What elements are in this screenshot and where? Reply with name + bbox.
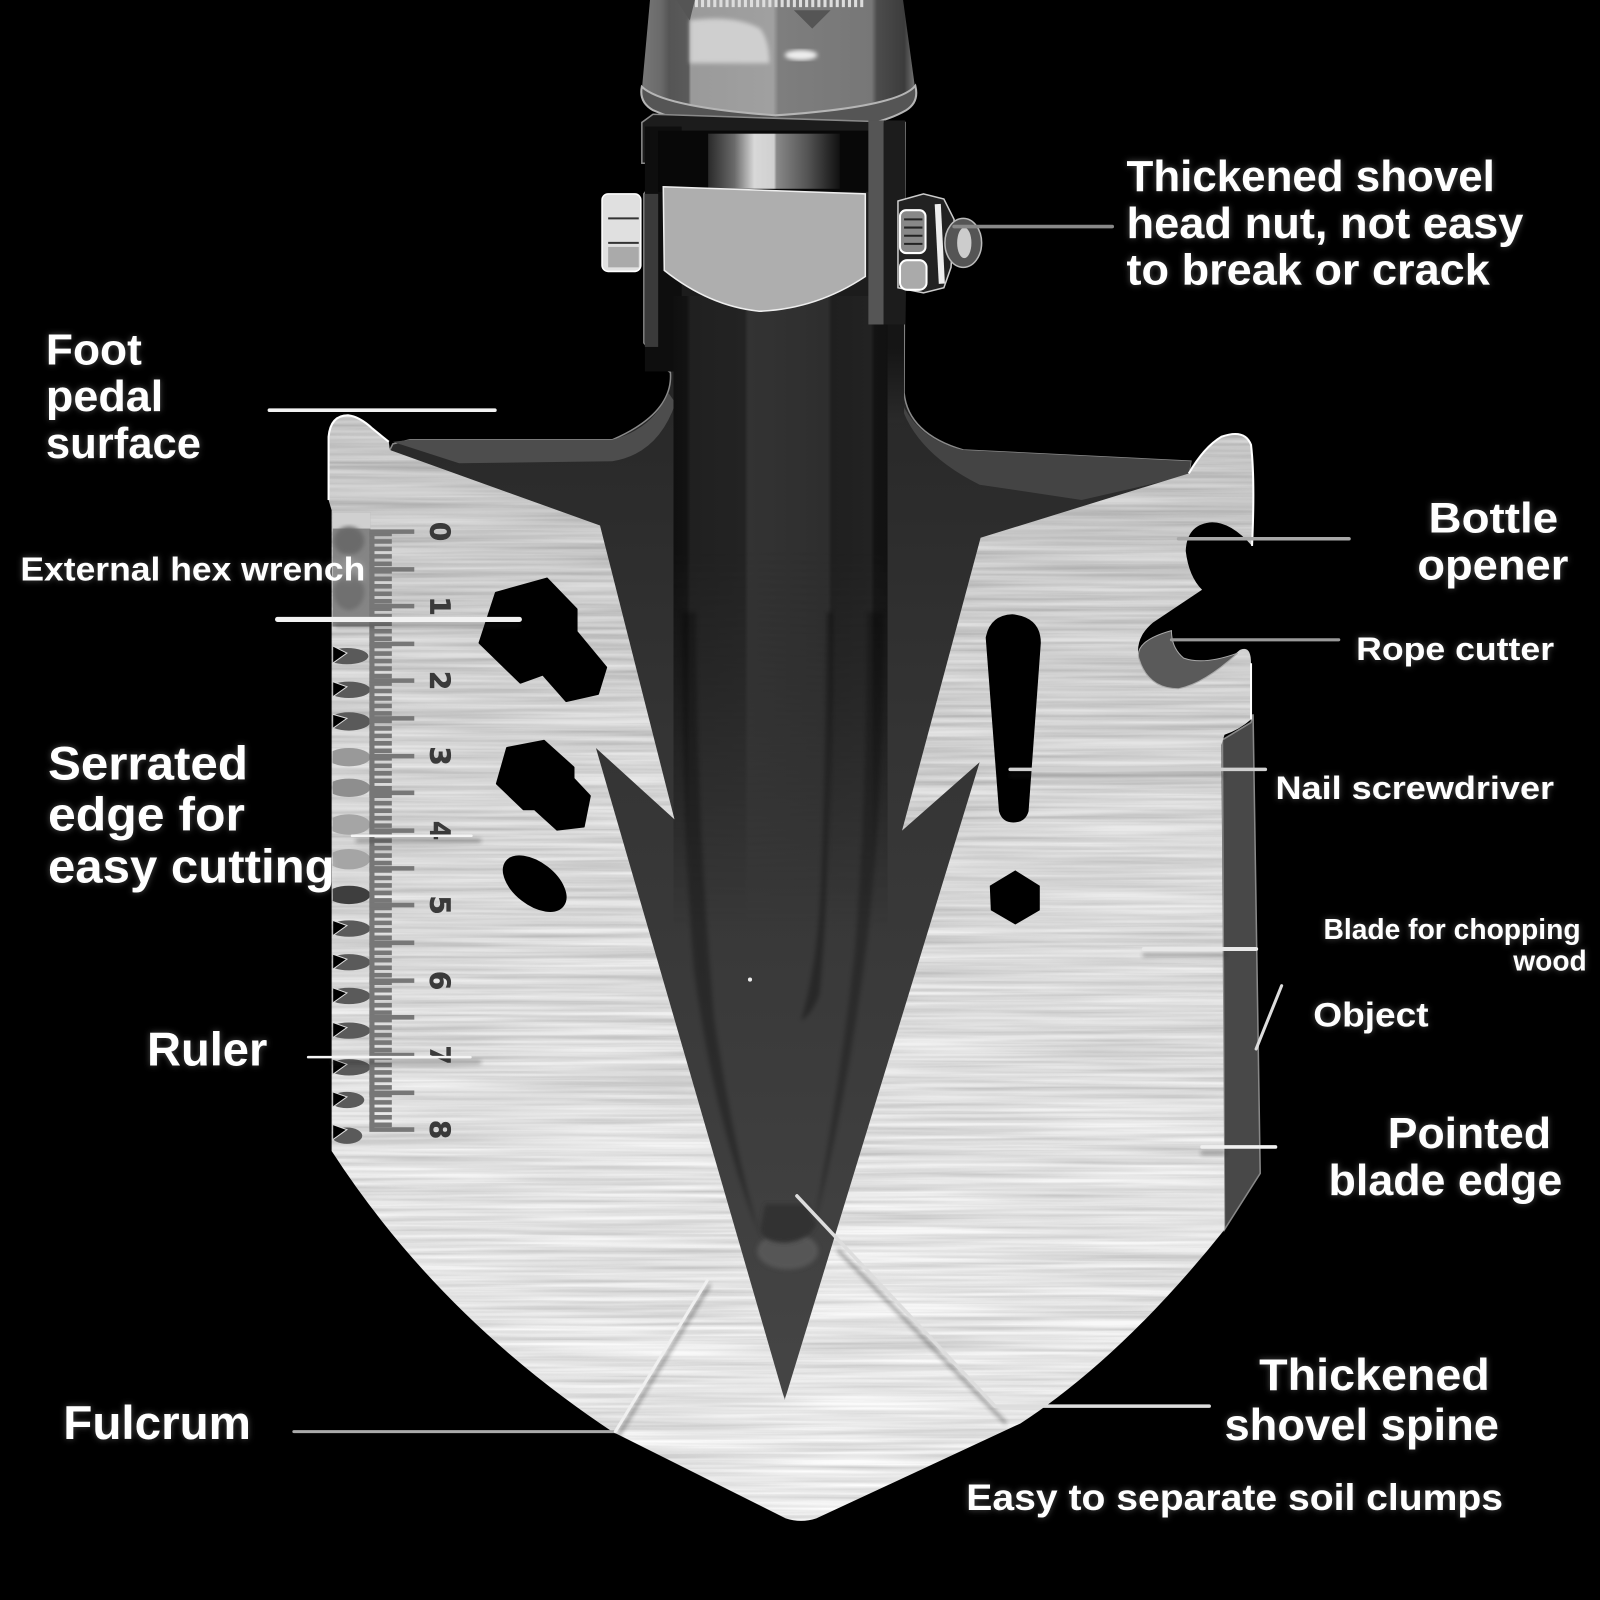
small rivet dot xyxy=(748,978,752,982)
label: blade for chopping wood xyxy=(1323,914,1587,977)
brushed steel blade xyxy=(306,408,1286,1531)
knurled silver wedge xyxy=(663,187,865,311)
ruler numbers: 7 xyxy=(424,1046,456,1065)
label: thickened shovel spine: Thickened xyxy=(1259,1349,1490,1400)
label: pointed blade edge: blade edge xyxy=(1329,1156,1562,1205)
label: pointed blade edge: Pointed xyxy=(1388,1109,1551,1158)
label: foot pedal surface: Foot xyxy=(46,325,142,374)
label: serrated edge: Serrated xyxy=(48,738,248,790)
ruler numbers: 8 xyxy=(424,1120,456,1139)
label: nail screwdriver: Nail screwdriver xyxy=(1276,769,1554,806)
leader lines xyxy=(269,227,1349,1432)
shovel illustration xyxy=(306,0,1286,1531)
label: blade for chopping wood: Blade for chopping xyxy=(1323,914,1581,946)
left bolt xyxy=(602,194,641,271)
label: rope cutter: Rope cutter xyxy=(1356,630,1554,667)
ruler numbers: 6 xyxy=(424,971,456,990)
label: serrated edge: edge for xyxy=(48,789,245,841)
label: thickened shovel head nut: to break or crack xyxy=(1127,246,1490,295)
shovel handle ferrule xyxy=(641,0,916,134)
ruler numbers: 3 xyxy=(424,747,456,766)
rope cutter edge xyxy=(1138,631,1238,689)
ruler numbers: 1 xyxy=(424,597,456,616)
label: foot pedal surface: pedal xyxy=(46,372,163,421)
label: foot pedal surface: surface xyxy=(46,419,201,468)
label: fulcrum: Fulcrum xyxy=(63,1397,251,1449)
label: pointed blade edge xyxy=(1329,1109,1562,1205)
label: ruler: Ruler xyxy=(147,1023,267,1075)
label: external hex wrench: External hex wrench xyxy=(20,552,365,589)
spine grooves xyxy=(682,612,884,1269)
ruler numbers: 0 xyxy=(424,522,456,541)
label: bottle opener: opener xyxy=(1417,542,1569,590)
ruler numbers xyxy=(424,522,456,1139)
label: thickened shovel head nut: head nut, not easy xyxy=(1127,199,1524,248)
hex wrench holes xyxy=(480,579,606,922)
leader line shadows xyxy=(332,626,1224,1436)
label: bottle opener: Bottle xyxy=(1429,495,1558,543)
label: foot pedal surface xyxy=(46,325,201,468)
silver outline xyxy=(329,415,1253,719)
ruler numbers: 5 xyxy=(424,896,456,915)
right nut xyxy=(898,194,982,293)
label: easy to separate soil clumps: Easy to separate soil clumps xyxy=(966,1477,1503,1518)
label: blade for chopping wood: wood xyxy=(1512,945,1587,977)
label: thickened shovel spine: shovel spine xyxy=(1224,1399,1499,1450)
ruler numbers: 2 xyxy=(424,671,456,690)
label: thickened shovel spine xyxy=(1224,1349,1499,1450)
label: thickened shovel head nut: Thickened shovel xyxy=(1127,152,1495,201)
ruler ticks xyxy=(369,532,414,1130)
label: bottle opener xyxy=(1417,495,1569,590)
right blade edge xyxy=(1222,714,1260,1230)
label: serrated edge: easy cutting xyxy=(48,841,335,893)
nail screwdriver hole xyxy=(986,614,1041,924)
shovel head dark steel xyxy=(390,114,1191,1400)
inner neck socket xyxy=(645,120,905,347)
label: object: Object xyxy=(1313,997,1429,1035)
label: thickened shovel head nut xyxy=(1127,152,1524,295)
serrated edge xyxy=(332,512,370,1144)
ruler numbers: 4 xyxy=(424,821,456,840)
label: serrated edge xyxy=(48,738,335,893)
